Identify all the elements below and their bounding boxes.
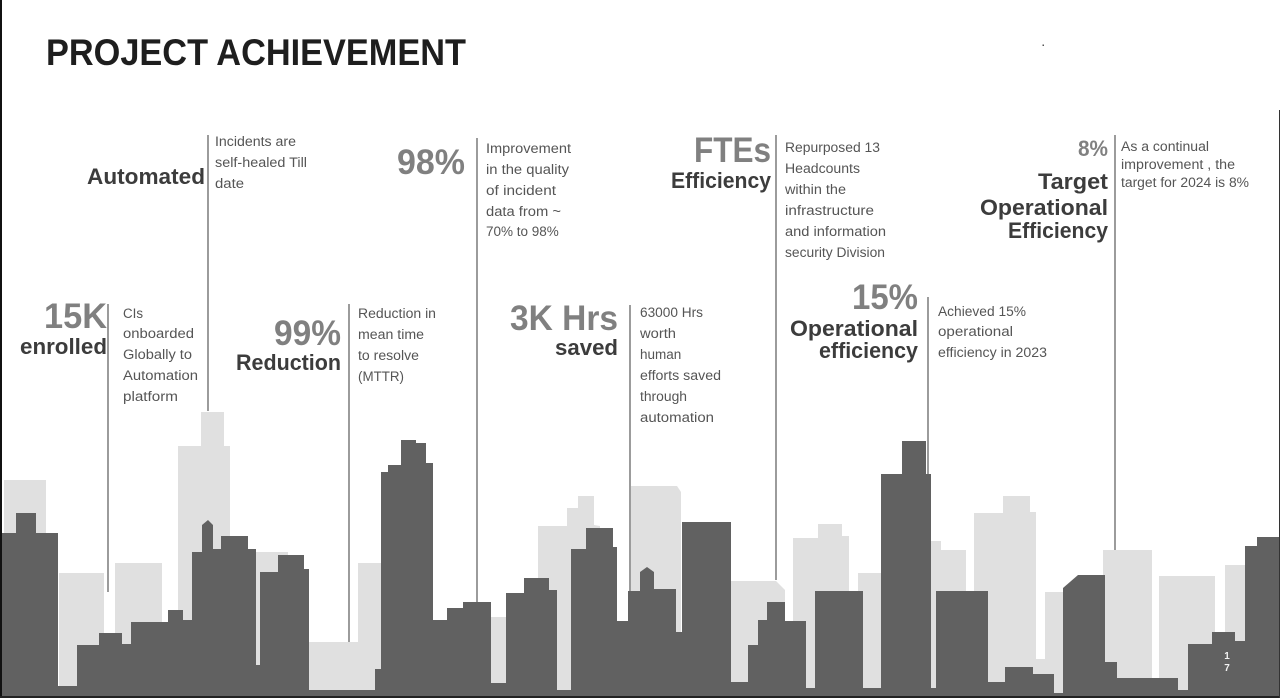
item: 99% Reduction: mean time (358, 327, 424, 342)
item: 15% Operational efficiency (790, 278, 1047, 363)
item: 99% Reduction: to resolve (358, 348, 419, 363)
item: Automated (87, 134, 307, 191)
item: 8% Target Operational Efficiency: Efficiency (1008, 218, 1109, 243)
page number: 7 (1224, 663, 1230, 674)
item: 98%: in the quality (486, 162, 569, 177)
item: 8% Target Operational Efficiency (980, 136, 1249, 243)
item: 3K Hrs saved: worth (639, 326, 676, 341)
item: 98%: of incident (486, 183, 556, 198)
item: 8% Target Operational Efficiency: Operational (980, 195, 1108, 220)
item: 3K Hrs saved: automation (640, 410, 714, 425)
item: 98%: 70% to 98% (486, 224, 559, 239)
item: 3K Hrs saved: saved (555, 335, 618, 360)
item: 99% Reduction: Reduction in (358, 306, 436, 321)
item: 3K Hrs saved: efforts saved (640, 368, 721, 383)
item: Automated: date (215, 176, 244, 191)
item: 15% Operational efficiency: Achieved 15% (938, 304, 1026, 319)
item: 15K enrolled (20, 297, 198, 404)
item: 15K enrolled: Globally to (123, 347, 192, 362)
page number (1224, 651, 1230, 674)
item: 15% Operational efficiency: 15% (852, 278, 918, 317)
item: 15% Operational efficiency: Operational (790, 316, 918, 341)
skyline: light background buildings (4, 412, 1247, 695)
item: 15K enrolled: platform (123, 389, 178, 404)
item: 15K enrolled: Automation (123, 368, 198, 383)
item: FTEs Efficiency: Headcounts (785, 161, 860, 176)
item: FTEs Efficiency: infrastructure (785, 203, 874, 218)
item: Automated: self-healed Till (215, 155, 307, 170)
item: 8% Target Operational Efficiency: improvement , the (1121, 157, 1235, 172)
item: Automated: Automated (87, 164, 205, 189)
item: 15K enrolled: 15K (44, 297, 107, 336)
item: 15K enrolled: CIs (123, 306, 143, 321)
item: 8% Target Operational Efficiency: target for 2024 is 8% (1121, 175, 1249, 190)
item: 8% Target Operational Efficiency: As a continual (1121, 139, 1209, 154)
vertical leader lines (108, 135, 1115, 642)
item: 15% Operational efficiency: efficiency in 2023 (938, 345, 1047, 360)
item: 98%: 98% (397, 143, 465, 182)
page number: 1 (1224, 651, 1230, 662)
item: 99% Reduction: (MTTR) (358, 369, 404, 384)
item: 98% (397, 141, 571, 239)
item: 3K Hrs saved: through (640, 389, 687, 404)
item: 15% Operational efficiency: operational (938, 324, 1013, 339)
item: 3K Hrs saved: 63000 Hrs (640, 305, 703, 320)
item: 15K enrolled: enrolled (20, 334, 107, 359)
item: 99% Reduction: Reduction (236, 350, 341, 375)
item: 3K Hrs saved (510, 299, 721, 425)
item: 8% Target Operational Efficiency: 8% (1078, 136, 1108, 161)
skyline: dark foreground buildings (2, 440, 1280, 698)
item: 98%: Improvement (486, 141, 571, 156)
title: PROJECT ACHIEVEMENT (46, 32, 466, 73)
item: 15K enrolled: onboarded (123, 326, 194, 341)
item: 8% Target Operational Efficiency: Target (1038, 169, 1109, 194)
item: FTEs Efficiency: Repurposed 13 (785, 140, 880, 155)
item: 15% Operational efficiency: efficiency (819, 338, 919, 363)
item: FTEs Efficiency: FTEs (694, 131, 771, 170)
item: 3K Hrs saved: human (640, 347, 681, 362)
item: 98%: data from ~ (486, 204, 561, 219)
item: 99% Reduction (236, 306, 436, 384)
item: 99% Reduction: 99% (274, 314, 341, 353)
item: FTEs Efficiency (671, 131, 886, 260)
item: Automated: Incidents are (215, 134, 296, 149)
item: FTEs Efficiency: and information (785, 224, 886, 239)
item: FTEs Efficiency: security Division (785, 245, 885, 260)
item: 3K Hrs saved: 3K Hrs (510, 299, 618, 338)
item: FTEs Efficiency: Efficiency (671, 168, 772, 193)
item: FTEs Efficiency: within the (784, 182, 846, 197)
